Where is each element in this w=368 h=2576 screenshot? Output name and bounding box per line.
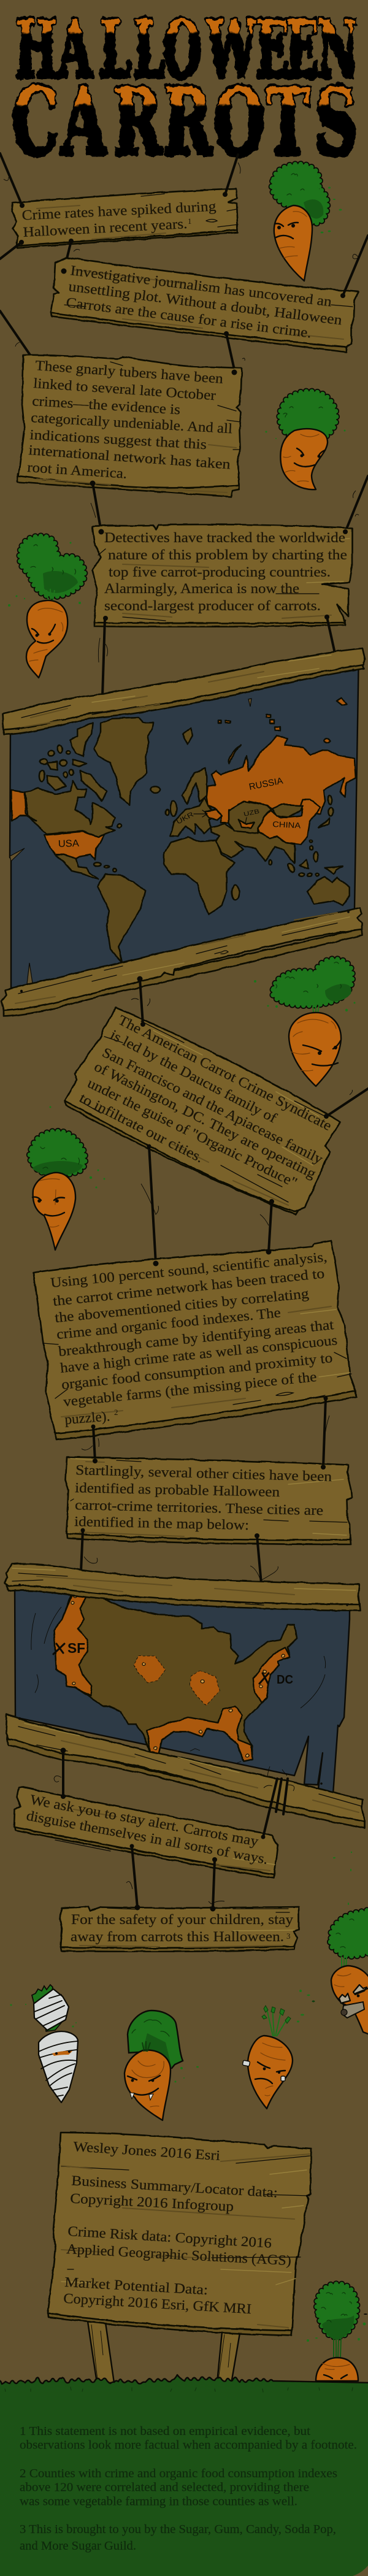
map labels: RUSSIA	[248, 776, 284, 792]
carrot 1: angry carrot top right	[272, 164, 342, 281]
map top board	[2, 648, 365, 735]
left post	[88, 2321, 114, 2383]
sign 2: investigative journalism	[51, 258, 358, 352]
title: CARROTS	[12, 67, 358, 176]
text: startlingly lines: identified as probable Halloween	[75, 1480, 280, 1500]
text: scientific analysis lines: have a high crime rate as well as conspicuous	[59, 1332, 338, 1376]
text: scientific analysis lines: organic food consumption and proximity to	[61, 1350, 333, 1392]
continents	[11, 698, 356, 963]
text: credits lines	[63, 2139, 292, 2317]
text: credits lines: Copyright 2016 Infogroup	[70, 2191, 234, 2214]
text: credits lines: Wesley Jones 2016 Esri	[73, 2139, 221, 2163]
text: gnarly tubers lines: root in America.	[27, 459, 128, 481]
text: gnarly tubers lines: indications suggest that this	[29, 427, 207, 452]
map tear marks	[31, 1607, 326, 1782]
text: scientific analysis lines: vegetable farms (the missing piece of the	[63, 1369, 317, 1409]
text: credits lines: Business Summary/Locator data:	[71, 2173, 278, 2200]
text: stay alert lines: disguise themselves in all sorts of ways.	[25, 1807, 269, 1867]
footnote 2: 2 Counties with crime and organic food consumption indexes	[20, 2467, 337, 2480]
map sheet: ocean	[15, 1589, 350, 1794]
text: scientific analysis lines: puzzle).	[64, 1408, 110, 1427]
text: gnarly tubers lines: linked to several late October	[33, 375, 217, 403]
map labels	[58, 776, 301, 849]
text: detectives lines: second-largest producer of carrots.	[104, 598, 321, 613]
text: safety lines: 3	[286, 1931, 291, 1941]
ground with grass edge	[0, 2375, 368, 2576]
text: scientific analysis lines: crime and organic food indexes. The	[56, 1305, 282, 1342]
text: startlingly lines: Startlingly, several other cities have been	[75, 1462, 332, 1484]
USA map	[5, 1563, 364, 1828]
footnote 1	[20, 2425, 357, 2452]
text: gnarly tubers lines: These gnarly tubers have been	[35, 358, 224, 386]
text: investigative lines: Carrots are the cause for a rise in crime.	[65, 294, 312, 340]
strings for sign 6	[82, 1249, 329, 1467]
strings for sign 8	[54, 1748, 294, 1909]
sign 10: credits on posts	[48, 2133, 312, 2383]
text: credits lines: Market Potential Data:	[64, 2274, 209, 2298]
text: scientific analysis lines	[50, 1249, 338, 1427]
strings for sign 5	[131, 976, 368, 1263]
carrot 6: pirate carrot with cigar	[297, 1852, 368, 2036]
sign 1: crime rates	[12, 189, 238, 248]
text: syndicate lines: The American Carrot Crime Syndicate	[116, 1012, 334, 1133]
footnote 3	[20, 2523, 336, 2553]
text: startlingly lines	[74, 1462, 332, 1533]
strings for sign 4	[98, 529, 348, 696]
footnotes	[20, 2425, 357, 2553]
text: credits lines: Crime Risk data: Copyright 2016	[67, 2223, 272, 2251]
sign 9: safety of your children	[60, 1905, 299, 1952]
sign 6: scientific analysis	[34, 1241, 356, 1439]
text: syndicate lines	[77, 1012, 334, 1190]
city labels	[53, 1640, 293, 1687]
text: gnarly tubers lines: crimes—the evidence is	[32, 393, 181, 417]
carrot 10: carrot buried in the ground	[307, 2284, 367, 2381]
carrot 3: twisted carrot left	[8, 536, 85, 678]
text: crime rates lines: Halloween in recent years.	[23, 216, 188, 240]
text: safety lines: away from carrots this Halloween.	[71, 1929, 284, 1944]
sign 8: stay alert	[14, 1787, 278, 1878]
title	[12, 4, 358, 176]
map sheet: ocean	[10, 650, 359, 991]
sign 4: detectives	[92, 524, 352, 627]
map labels: CHINA	[272, 819, 301, 830]
text: detectives lines: Alarmingly, America is now the	[104, 581, 299, 596]
map labels: USA	[58, 838, 79, 849]
world map	[1, 648, 365, 1016]
map labels: UKR	[175, 811, 195, 826]
text: scientific analysis lines: Using 100 percent sound, scientific analysis,	[50, 1249, 328, 1290]
text: syndicate lines: San Francisco and the Apiacease family	[100, 1045, 326, 1167]
text: stay alert lines	[25, 1792, 269, 1867]
footnote 1: observations look more factual when accompanied by a footnote.	[20, 2439, 357, 2452]
text: startlingly lines: carrot-crime territories. These cities are	[75, 1497, 323, 1518]
map top board	[5, 1563, 360, 1611]
footnote 1: 1 This statement is not based on empirical evidence, but	[20, 2425, 310, 2438]
text: gnarly tubers lines: categorically undeniable. And all	[31, 410, 233, 436]
text: scientific analysis lines: 2	[114, 1408, 118, 1417]
text: investigative lines: Investigative journalism has uncovered an	[69, 263, 333, 310]
text: syndicate lines: to infiltrate our cities.	[77, 1090, 206, 1165]
strings for sign 1	[0, 153, 240, 271]
text: gnarly tubers lines	[27, 358, 233, 481]
footnote 2	[20, 2467, 337, 2509]
text: detectives lines: top five carrot-producing countries.	[109, 564, 331, 580]
text: detectives lines	[104, 530, 347, 613]
sign 5: American Carrot Crime Syndicate	[64, 1008, 340, 1214]
map tears	[10, 699, 251, 984]
text: syndicate lines: of Washington, DC. They are operating	[92, 1059, 319, 1182]
map bottom board	[6, 1714, 364, 1828]
text: safety lines: For the safety of your children, stay	[71, 1912, 294, 1927]
footnote 2: above 120 were correlated and selected, providing there	[20, 2480, 309, 2494]
carrot 9: Frankenstein carrot	[242, 2006, 293, 2109]
USA land and regions	[54, 1593, 297, 1761]
footnote 3: 3 This is brought to you by the Sugar, Gum, Candy, Soda Pop,	[20, 2523, 336, 2536]
text: startlingly lines: identified in the map below:	[74, 1514, 249, 1533]
text: safety lines	[71, 1912, 294, 1944]
strings for sign 7	[81, 1459, 326, 1584]
carrot 2: grinning crescent carrot	[265, 391, 346, 489]
text: crime rates lines: 1	[188, 217, 191, 226]
text: scientific analysis lines: the abovementioned cities by correlating	[54, 1286, 310, 1325]
sign 3: gnarly tubers	[18, 355, 242, 497]
text: credits lines: Applied Geographic Solutions (AGS)	[66, 2241, 292, 2268]
right post	[217, 2332, 240, 2383]
sign 7: startlingly	[66, 1457, 352, 1544]
text: credits lines: Copyright 2016 Esri, GfK MRI	[63, 2291, 252, 2317]
footnote 2: was some vegetable farming in those counties as well.	[20, 2495, 297, 2509]
text: detectives lines: Detectives have tracked the worldwide	[104, 530, 345, 545]
city labels: DC	[277, 1673, 293, 1687]
text: investigative lines	[65, 263, 343, 340]
strings for sign 2	[0, 236, 368, 372]
map labels: UZB	[243, 808, 260, 818]
text: scientific analysis lines: breakthrough came by identifying areas that	[58, 1317, 335, 1359]
carrot 8: vampire carrot	[125, 2011, 199, 2120]
text: stay alert lines: We ask you to stay alert. Carrots may	[29, 1792, 260, 1849]
text: gnarly tubers lines: international network has taken	[28, 442, 231, 472]
text: syndicate lines: is led by the Daucus family of	[108, 1027, 280, 1126]
text: crime rates lines: Crime rates have spiked during	[21, 199, 217, 223]
footnote 3: and More Sugar Guild.	[20, 2539, 136, 2553]
title: HALLOWEEN	[15, 4, 358, 96]
text: detectives lines: nature of this problem by charting the	[108, 547, 347, 562]
carrot 7: mummy carrot	[10, 1985, 78, 2103]
carrot 4: sneering carrot right	[254, 959, 356, 1086]
carrot 5: smirking carrot left	[29, 1106, 105, 1250]
text: crime rates lines	[21, 199, 217, 240]
corner curve	[353, 2566, 368, 2576]
text: scientific analysis lines: the carrot crime network has been traced to	[52, 1265, 325, 1309]
text: investigative lines: unsettling plot. Without a doubt, Halloween	[67, 278, 343, 328]
strings for sign 3	[90, 369, 368, 532]
nails	[135, 1905, 216, 1911]
text: syndicate lines: under the guise of "Organic Produce"	[85, 1075, 300, 1190]
map bottom board	[1, 908, 362, 1016]
city labels: SF	[67, 1640, 85, 1656]
